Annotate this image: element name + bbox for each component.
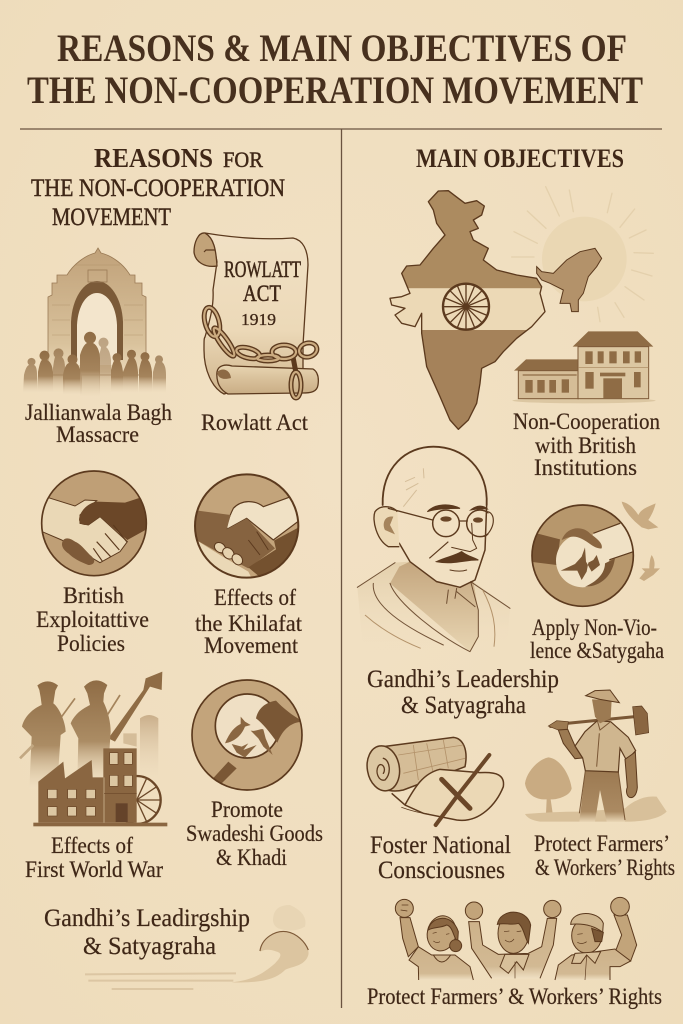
heading: reasons bbox=[31, 143, 285, 231]
label: Jallianwala Bagh Massacre: Massacre bbox=[56, 422, 139, 447]
icon: Rowlatt Act scroll with chain: ACT bbox=[243, 281, 281, 306]
icon: Rowlatt Act scroll with chain: ROWLATT bbox=[224, 257, 301, 282]
icon: handshake Khilafat Movement bbox=[192, 474, 300, 582]
birds bbox=[622, 502, 660, 581]
label: Effects of First World War: Effects of bbox=[51, 833, 133, 858]
heading: reasons: THE NON-COOPERATION bbox=[31, 175, 285, 202]
label: Jallianwala Bagh Massacre bbox=[25, 400, 172, 447]
icon: Rowlatt Act scroll with chain bbox=[194, 233, 319, 398]
label: Effects of the Khilafat Movement: the Khilafat bbox=[195, 611, 303, 636]
label: Rowlatt Act: Rowlatt Act bbox=[201, 410, 309, 435]
label: Gandhi's Leadirgship & Satyagraha: & Satyagraha bbox=[83, 933, 216, 960]
sun and rays bbox=[512, 187, 653, 322]
label: Apply Non-Violence & Satyagaha bbox=[530, 615, 664, 663]
label: Promote Swadeshi Goods & Khadi: & Khadi bbox=[216, 845, 287, 870]
label: Non-Cooperation with British Institutions: Institutions bbox=[534, 455, 637, 480]
label: British Exploitative Policies bbox=[36, 583, 149, 656]
label: Effects of First World War: First World War bbox=[25, 857, 163, 882]
label: Effects of First World War bbox=[25, 833, 163, 882]
label: Apply Non-Violence & Satyagaha: lence &Satygaha bbox=[530, 638, 664, 663]
label: Apply Non-Violence & Satyagaha: Apply Non-Vio- bbox=[532, 615, 657, 640]
icon: smoke swirl and lines bbox=[85, 905, 309, 989]
icon: three people with raised fists bbox=[395, 897, 637, 980]
icon: Jallianwala Bagh arch and crowd bbox=[23, 248, 166, 397]
heading: reasons: FOR bbox=[223, 147, 263, 172]
heading: main objectives: MAIN OBJECTIVES bbox=[416, 144, 624, 173]
heading: reasons: REASONS bbox=[94, 143, 213, 173]
building bbox=[512, 331, 656, 403]
icon: handshake British exploitative policies bbox=[38, 471, 148, 576]
label: Effects of the Khilafat Movement: Effects of bbox=[214, 585, 296, 610]
icon: India map tricolour bbox=[373, 180, 656, 437]
label: Foster National Consciousness bbox=[370, 832, 511, 884]
person: man with cap bbox=[555, 897, 637, 980]
label: Gandhi's Leadership & Satyagraha bbox=[367, 666, 559, 719]
label: British Exploitative Policies: Policies bbox=[57, 631, 125, 656]
label: Foster National Consciousness: Foster National bbox=[370, 832, 511, 859]
icon: khadi cloth roll and crossed sticks bbox=[364, 737, 504, 825]
title bbox=[27, 27, 643, 112]
icon: Rowlatt Act scroll with chain: 1919 bbox=[241, 310, 276, 329]
label: Foster National Consciousness: Consciousnes bbox=[378, 857, 505, 884]
icon: non-violence handshake with doves bbox=[530, 502, 660, 606]
person: centre man bbox=[465, 900, 561, 978]
label: Gandhi's Leadership & Satyagraha: Gandhi’s Leadership bbox=[367, 666, 559, 693]
Ashoka wheel bbox=[443, 284, 489, 330]
icon: swadeshi circle with birds bbox=[192, 680, 304, 790]
label: Effects of the Khilafat Movement: Movement bbox=[204, 633, 299, 658]
person: woman bbox=[395, 899, 473, 980]
icon: farmer with hoe and tree bbox=[525, 690, 667, 822]
label: Gandhi's Leadership & Satyagraha: & Satyagraha bbox=[401, 692, 526, 719]
label: Non-Cooperation with British Institutions bbox=[513, 409, 660, 480]
dove in hands bbox=[561, 547, 600, 580]
label: Protect Farmers' & Workers' Rights bbox=[534, 831, 675, 880]
icon: soldiers, factory, arrow bbox=[20, 672, 162, 788]
label: Promote Swadeshi Goods & Khadi: Swadeshi Goods bbox=[186, 821, 323, 846]
label: Non-Cooperation with British Institutions: with British bbox=[535, 433, 636, 458]
label: Non-Cooperation with British Institutions: Non-Cooperation bbox=[513, 409, 660, 434]
label: British Exploitative Policies: British bbox=[63, 583, 124, 608]
label: Gandhi's Leadirgship & Satyagraha: Gandhi’s Leadirgship bbox=[44, 905, 250, 932]
label: Promote Swadeshi Goods & Khadi bbox=[186, 797, 323, 870]
label: Gandhi's Leadirgship & Satyagraha bbox=[44, 905, 250, 960]
label: Promote Swadeshi Goods & Khadi: Promote bbox=[211, 797, 283, 822]
northeast region bbox=[537, 248, 602, 312]
label: Jallianwala Bagh Massacre: Jallianwala Bagh bbox=[25, 400, 172, 425]
label: British Exploitative Policies: Exploitattive bbox=[36, 607, 149, 632]
icon: factory with wheel bbox=[33, 748, 167, 826]
heading: reasons: MOVEMENT bbox=[52, 204, 171, 231]
icon: Gandhi portrait bbox=[357, 447, 510, 653]
label: Effects of the Khilafat Movement bbox=[195, 585, 303, 658]
